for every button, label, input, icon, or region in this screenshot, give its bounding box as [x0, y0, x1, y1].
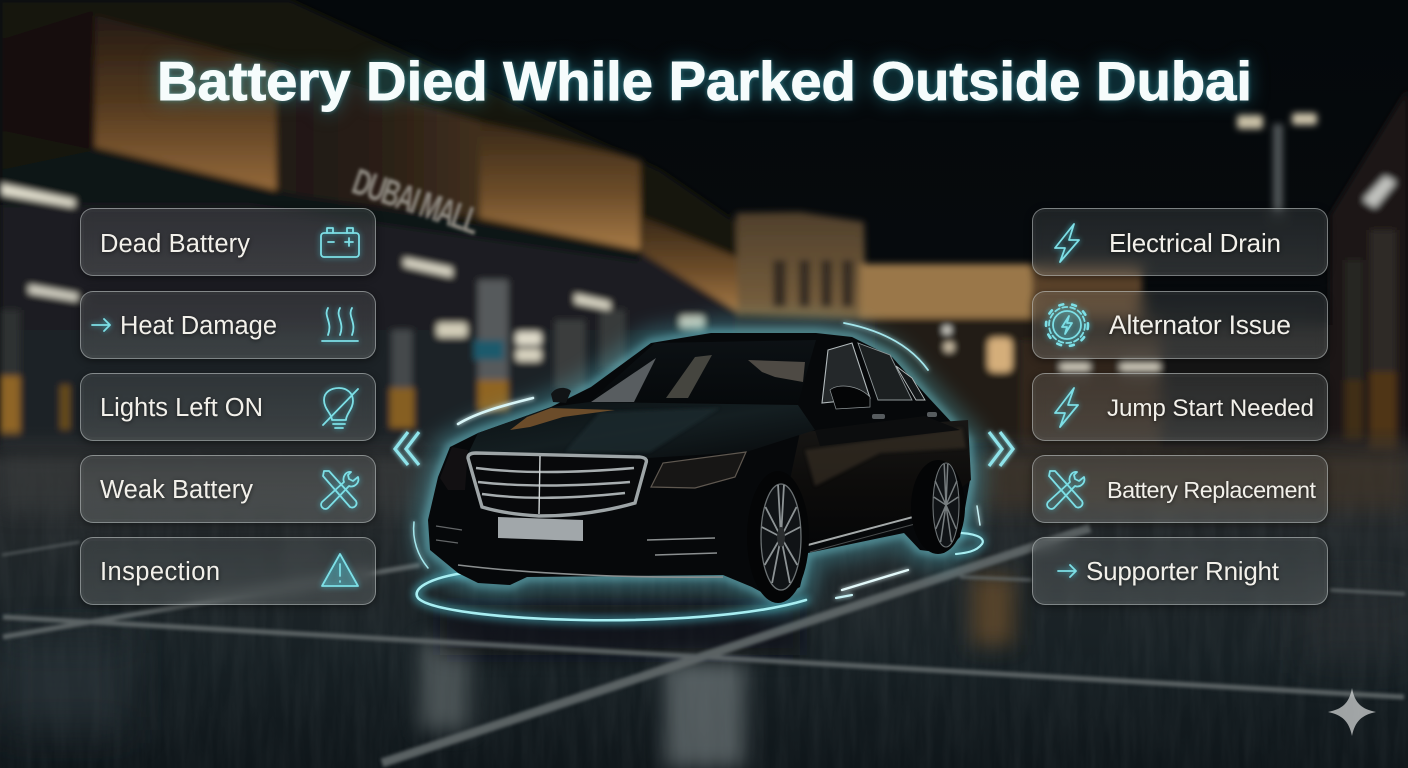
panel: electrical drain [1032, 208, 1328, 276]
car [428, 333, 971, 603]
hood [468, 402, 815, 458]
side reflection [805, 428, 966, 486]
label: Supporter Rnight: Supporter Rnight [1086, 556, 1279, 586]
panel: dead battery [80, 208, 376, 276]
front wheel [747, 471, 809, 603]
icon: lightning bolt [1054, 388, 1078, 426]
grille [468, 453, 646, 516]
side windows [822, 343, 870, 403]
left chevrons [395, 432, 419, 465]
rear wheel [911, 460, 965, 554]
label: Inspection: Inspection [100, 558, 220, 586]
side body panel [790, 420, 971, 545]
title: Battery Died While Parked Outside Dubai [157, 50, 1252, 112]
panel: supporter rnight [1032, 537, 1328, 605]
label: Jump Start Needed: Jump Start Needed [1106, 394, 1314, 422]
label: Weak Battery: Weak Battery [100, 476, 253, 504]
car body [428, 333, 970, 600]
mirrors [830, 386, 870, 409]
icon: sparkle watermark [1328, 688, 1376, 736]
energy swooshes [414, 323, 980, 598]
windshield [589, 340, 816, 403]
right chevrons [989, 432, 1013, 466]
panel: inspection [80, 537, 376, 605]
headlight [651, 452, 746, 488]
car underglow and aura [428, 333, 970, 600]
arrow [1058, 564, 1076, 576]
icon: heat waves [322, 308, 358, 340]
icon: crossed out bulb [322, 388, 358, 428]
sign: Dubai Mall: DUBAI MALL [347, 161, 486, 243]
label: Dead Battery: Dead Battery [100, 230, 250, 258]
icon: lightning bolt [1054, 224, 1078, 262]
background: mall and parking structure [0, 0, 1408, 460]
panel: alternator issue [1032, 291, 1328, 359]
panel: battery replacement [1032, 455, 1328, 523]
windshield interior [591, 358, 656, 402]
panel: lights left on [80, 373, 376, 441]
hood sheen [565, 408, 720, 452]
arrow [92, 318, 110, 330]
door handles [872, 412, 937, 419]
panel: weak battery [80, 455, 376, 523]
hood reflection [510, 408, 615, 430]
icon: warning triangle [322, 554, 358, 586]
icon: alternator gear [1046, 304, 1088, 346]
label: Electrical Drain: Electrical Drain [1108, 228, 1280, 258]
label: Alternator Issue: Alternator Issue [1108, 310, 1290, 340]
panel: jump start needed [1032, 373, 1328, 441]
glowing ring under car [417, 533, 983, 620]
bumper details [436, 513, 930, 577]
label: Lights Left ON: Lights Left ON [100, 394, 262, 422]
label: Heat Damage: Heat Damage [120, 312, 276, 340]
licence plate [498, 517, 583, 541]
icon: crossed tools [1047, 470, 1084, 508]
label: Battery Replacement: Battery Replacement [1106, 476, 1316, 502]
icon: crossed tools [321, 470, 358, 508]
icon: battery [320, 228, 358, 256]
panel: heat damage [80, 291, 376, 359]
background: wet asphalt floor [0, 425, 1408, 768]
